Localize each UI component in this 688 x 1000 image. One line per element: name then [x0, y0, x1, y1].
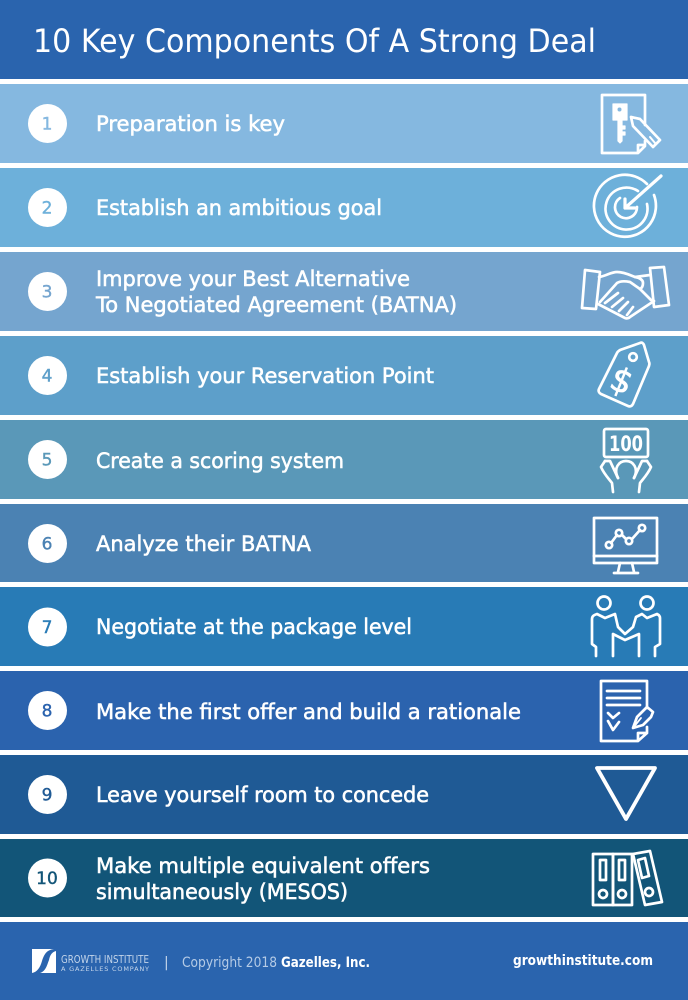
row 7: package level [0, 587, 688, 666]
website: growthinstitute.com [513, 953, 653, 969]
row 3: BATNA: Improve your Best Alternative [96, 267, 410, 291]
footer [0, 922, 688, 1000]
icon: target with arrow [594, 175, 661, 237]
copyright: Copyright 2018 [182, 955, 277, 971]
row 1: preparation [0, 84, 688, 163]
row 7: package level: Negotiate at the package level [96, 615, 412, 639]
icon: person holding 100 sign: 100 [609, 432, 643, 456]
row 8: first offer [0, 671, 688, 750]
row 6: analyze BATNA: Analyze their BATNA [96, 532, 312, 556]
logo: Growth Institute: A GAZELLES COMPANY [61, 965, 149, 973]
icon: person holding 100 sign [601, 429, 651, 492]
title banner [0, 0, 688, 79]
row 10: MESOS: 10 [36, 869, 58, 889]
row 4: reservation point [0, 336, 688, 415]
row 2: ambitious goal: Establish an ambitious goal [96, 196, 382, 220]
row 4: reservation point: Establish your Reservation Point [96, 364, 434, 388]
row 2: ambitious goal: 2 [42, 198, 52, 218]
row 5: scoring system [0, 420, 688, 499]
title banner: 10 Key Components Of A Strong Deal [33, 22, 596, 60]
row 8: first offer: Make the first offer and build a rationale [96, 700, 521, 724]
row 9: room to concede [0, 755, 688, 834]
row 5: scoring system: 5 [42, 450, 52, 470]
icon: price tag: $ [605, 358, 639, 402]
row 9: room to concede: 9 [42, 786, 52, 806]
copyright [164, 955, 370, 971]
copyright: Gazelles, Inc. [281, 955, 370, 971]
logo: Growth Institute: GROWTH INSTITUTE [61, 953, 149, 966]
row 3: BATNA [0, 252, 688, 331]
row 10: MESOS: simultaneously (MESOS) [96, 880, 348, 904]
icon: binders [593, 851, 662, 905]
row 1: preparation: Preparation is key [96, 112, 285, 136]
row 5: scoring system: Create a scoring system [96, 449, 344, 473]
row 7: package level: 7 [42, 618, 52, 638]
row 10: MESOS [0, 839, 688, 917]
icon: two people shaking hands [592, 596, 660, 656]
icon: inverted triangle [597, 768, 655, 819]
row 2: ambitious goal [0, 168, 688, 247]
logo: Growth Institute [32, 949, 149, 973]
row 4: reservation point: 4 [42, 366, 52, 386]
icon: key and pencil on page [602, 95, 660, 153]
row 6: analyze BATNA: 6 [42, 534, 52, 554]
copyright: | [164, 955, 169, 971]
row 3: BATNA: To Negotiated Agreement (BATNA) [95, 293, 457, 317]
icon: monitor with line chart [594, 518, 657, 573]
row 10: MESOS: Make multiple equivalent offers [96, 854, 430, 878]
icon: document with pen [601, 681, 653, 741]
row 3: BATNA: 3 [42, 282, 52, 302]
icon: handshake [582, 267, 669, 318]
row 9: room to concede: Leave yourself room to concede [96, 783, 429, 807]
icon: price tag [599, 343, 649, 406]
row 8: first offer: 8 [42, 702, 52, 722]
row 1: preparation: 1 [42, 114, 52, 134]
row 6: analyze BATNA [0, 504, 688, 582]
